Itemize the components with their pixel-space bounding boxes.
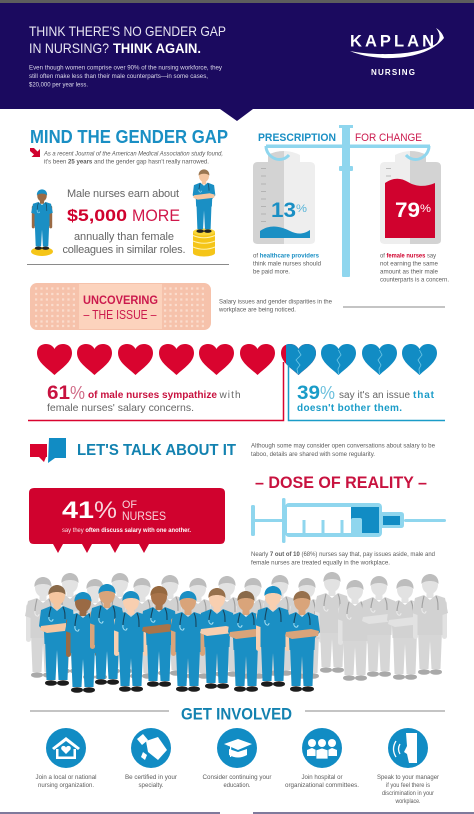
study note bbox=[43, 152, 223, 166]
IV bag: 13%: % bbox=[296, 203, 307, 215]
crowd: blue nurses in front bbox=[39, 584, 320, 693]
heading: mind the gender gap: MIND THE GENDER GAP bbox=[30, 127, 228, 147]
callout: 41% of nurses bbox=[29, 488, 225, 553]
caption: healthcare providers bbox=[253, 252, 322, 276]
action: speak to your manager: if you feel there is bbox=[386, 782, 430, 789]
intro text: Even though women comprise over 90% of the nursing workforce, they bbox=[29, 64, 223, 72]
crowd: grey nurses behind bbox=[25, 572, 448, 681]
caption: female nurses: amount as their male bbox=[380, 268, 439, 276]
action: speak to your manager: workplace. bbox=[395, 798, 421, 805]
statistic: 39%: doesn't bother them. bbox=[297, 403, 402, 414]
heading: prescription for change bbox=[258, 132, 422, 144]
headline: THINK THERE'S NO GENDER GAP bbox=[29, 23, 226, 39]
statistic: 61%: % bbox=[70, 383, 85, 403]
action: get certified bbox=[125, 728, 177, 789]
heading: prescription for change: PRESCRIPTION bbox=[258, 132, 336, 144]
study note: it's been 25 years and the gender gap hasn't really narrowed. bbox=[44, 160, 209, 166]
headline: IN NURSING? bbox=[29, 40, 109, 56]
action: continue education: education. bbox=[224, 782, 251, 789]
bottom strip bbox=[0, 812, 474, 814]
action: speak to your manager: discrimination in your bbox=[382, 790, 434, 797]
action: speak to your manager bbox=[377, 728, 439, 805]
caption: healthcare providers: think male nurses should bbox=[253, 260, 322, 268]
hearts: 61% whole red bbox=[37, 344, 316, 375]
IV bag: 79%: % bbox=[420, 203, 431, 215]
statistic: $5,000 more: MORE bbox=[132, 206, 180, 225]
callout: 41% of nurses: NURSES bbox=[122, 509, 166, 523]
caption: female nurses: counterparts is a concern. bbox=[380, 276, 449, 284]
callout: 41% of nurses: OF bbox=[122, 499, 137, 511]
heading: get involved: GET INVOLVED bbox=[181, 706, 292, 724]
statistic: 39% bbox=[297, 383, 435, 414]
logo: Kaplan Nursing: KAPLAN bbox=[350, 32, 434, 50]
statistic: 61%: with bbox=[218, 390, 240, 401]
action: join an organization bbox=[36, 728, 96, 789]
talk note: taboo, details are shared with some regularity. bbox=[251, 451, 375, 458]
issue note: Salary issues and gender disparities in the bbox=[219, 298, 333, 306]
IV bag: 13% bbox=[253, 151, 315, 244]
caption: female nurses bbox=[380, 252, 449, 284]
caption: healthcare providers: of healthcare providers bbox=[253, 252, 320, 260]
intro text: still often make less than their male counterparts—in some cases, bbox=[29, 73, 208, 80]
syringe bbox=[251, 498, 446, 543]
IV bag: 79% bbox=[380, 151, 441, 244]
header banner bbox=[0, 3, 474, 121]
action: join committees: Join hospital or bbox=[302, 774, 342, 781]
heading: let's talk about it: LET'S TALK ABOUT IT bbox=[77, 442, 236, 459]
statistic: 39%: that bbox=[413, 390, 435, 401]
heading: dose of reality: – DOSE OF REALITY – bbox=[255, 473, 427, 492]
heading: prescription for change: FOR CHANGE bbox=[355, 132, 422, 144]
statistic: $5,000 more: $5,000 bbox=[67, 206, 127, 225]
action: join committees bbox=[285, 728, 359, 789]
divider lines: red and blue bbox=[28, 362, 445, 420]
callout: 41% of nurses: % bbox=[94, 497, 117, 524]
callout: 41% of nurses: 41 bbox=[62, 497, 94, 524]
statistic: 61% bbox=[47, 383, 240, 414]
action: join committees: organizational committees. bbox=[285, 782, 359, 789]
headline: THINK AGAIN. bbox=[113, 40, 201, 56]
statistic: 39%: % bbox=[320, 383, 335, 403]
icon: speech bubbles bbox=[30, 438, 66, 463]
statistic: 39%: 39 bbox=[297, 383, 320, 404]
statistic: $5,000 more: annually than female bbox=[74, 231, 174, 243]
statistic: $5,000 more bbox=[62, 188, 186, 256]
bandage: uncovering the issue bbox=[30, 283, 211, 330]
logo: Kaplan Nursing: NURSING bbox=[371, 68, 415, 77]
statistic: 39%: say it's an issue bbox=[339, 390, 410, 401]
action: get certified: Be certified in your bbox=[125, 774, 177, 781]
statistic: $5,000 more: colleagues in similar roles. bbox=[62, 244, 186, 256]
headline bbox=[29, 23, 226, 56]
action: continue education: Consider continuing your bbox=[202, 774, 272, 781]
reality note: Nearly 7 out of 10 (68%) nurses say that, pay issues aside, male and bbox=[251, 551, 436, 558]
action: join an organization: Join a local or national bbox=[36, 774, 96, 781]
study note: As a recent Journal of the American Medical Association study found, bbox=[43, 152, 223, 158]
callout: 41% of nurses: say they often discuss salary with one another. bbox=[62, 528, 191, 534]
caption: female nurses: of female nurses say bbox=[380, 252, 437, 260]
action: join an organization: nursing organization. bbox=[38, 782, 94, 789]
action: continue education bbox=[202, 728, 272, 789]
caption: healthcare providers: be paid more. bbox=[253, 268, 290, 276]
action: speak to your manager: Speak to your manager bbox=[377, 774, 439, 781]
reality note: female nurses are treated equally in the workplace. bbox=[251, 560, 390, 566]
issue note: workplace are being noticed. bbox=[218, 306, 296, 314]
issue note bbox=[218, 298, 333, 314]
left nurse on single coin bbox=[31, 189, 53, 256]
caption: female nurses: not earning the same bbox=[380, 260, 439, 268]
statistic: 61%: of male nurses sympathize bbox=[88, 390, 217, 401]
statistic: 61%: female nurses' salary concerns. bbox=[47, 402, 194, 414]
blue fill bbox=[260, 226, 310, 238]
IV pole bbox=[266, 125, 430, 277]
IV bag: 13%: 13 bbox=[271, 199, 296, 222]
statistic: 61%: 61 bbox=[47, 383, 70, 404]
icon: red arrow bbox=[30, 148, 40, 157]
action: get certified: specialty. bbox=[138, 782, 164, 789]
hearts: 39% broken blue bbox=[281, 344, 437, 375]
talk note: Although some may consider open conversations about salary to be bbox=[251, 442, 436, 450]
bandage: uncovering the issue: – THE ISSUE – bbox=[84, 308, 157, 322]
red fill bbox=[385, 179, 435, 238]
top strip bbox=[0, 0, 474, 3]
statistic: $5,000 more: Male nurses earn about bbox=[67, 188, 179, 200]
logo: Kaplan Nursing bbox=[350, 28, 444, 77]
right nurse on coin stack bbox=[193, 169, 215, 256]
bandage: uncovering the issue: UNCOVERING bbox=[83, 293, 158, 307]
intro text bbox=[29, 64, 223, 88]
talk note bbox=[251, 442, 436, 458]
reality note bbox=[251, 551, 436, 566]
intro text: $20,000 per year less. bbox=[29, 82, 88, 88]
IV bag: 79%: 79 bbox=[395, 199, 420, 222]
